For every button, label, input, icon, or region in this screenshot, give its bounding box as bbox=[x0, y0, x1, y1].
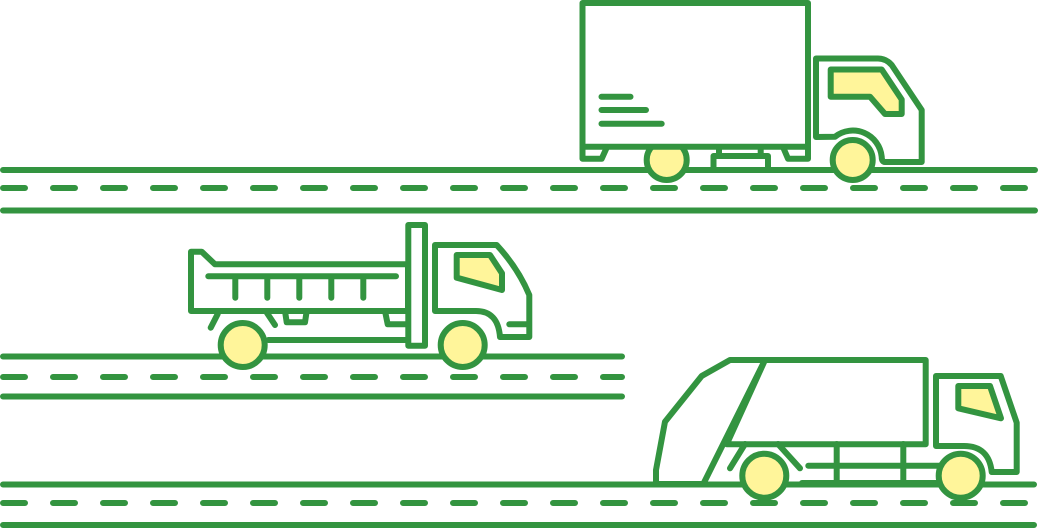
truck: garbage truck bbox=[656, 360, 1017, 498]
front wheel bbox=[833, 140, 873, 180]
bed struts and brackets bbox=[211, 311, 408, 340]
front wheel bbox=[441, 323, 485, 367]
front wheel bbox=[939, 454, 983, 498]
cab bbox=[936, 376, 1017, 472]
road: middle bbox=[3, 356, 622, 396]
rear wheel bbox=[742, 454, 786, 498]
cargo text lines bbox=[602, 97, 662, 124]
side toolbox bbox=[719, 146, 761, 156]
truck: dump truck bbox=[191, 225, 529, 367]
dump bed bbox=[191, 252, 408, 311]
rear wheel bbox=[647, 140, 687, 180]
cab bbox=[435, 245, 529, 337]
cab window bbox=[457, 255, 502, 290]
rear wheel bbox=[221, 323, 265, 367]
container body bbox=[727, 360, 926, 444]
chassis frame bbox=[802, 444, 940, 484]
rear and side skirts bbox=[582, 146, 808, 159]
truck: box truck bbox=[582, 3, 922, 180]
cab bbox=[816, 58, 922, 162]
wheel arch struts bbox=[730, 444, 800, 468]
headboard bbox=[408, 225, 425, 346]
road: bottom bbox=[3, 484, 1034, 525]
cab window bbox=[958, 386, 1001, 418]
cargo box bbox=[582, 3, 808, 147]
cab window bbox=[831, 70, 902, 114]
road: top bbox=[3, 170, 1035, 210]
rear hopper bbox=[656, 360, 765, 484]
bed rail and ribs bbox=[208, 276, 396, 298]
cab step bbox=[509, 321, 529, 327]
